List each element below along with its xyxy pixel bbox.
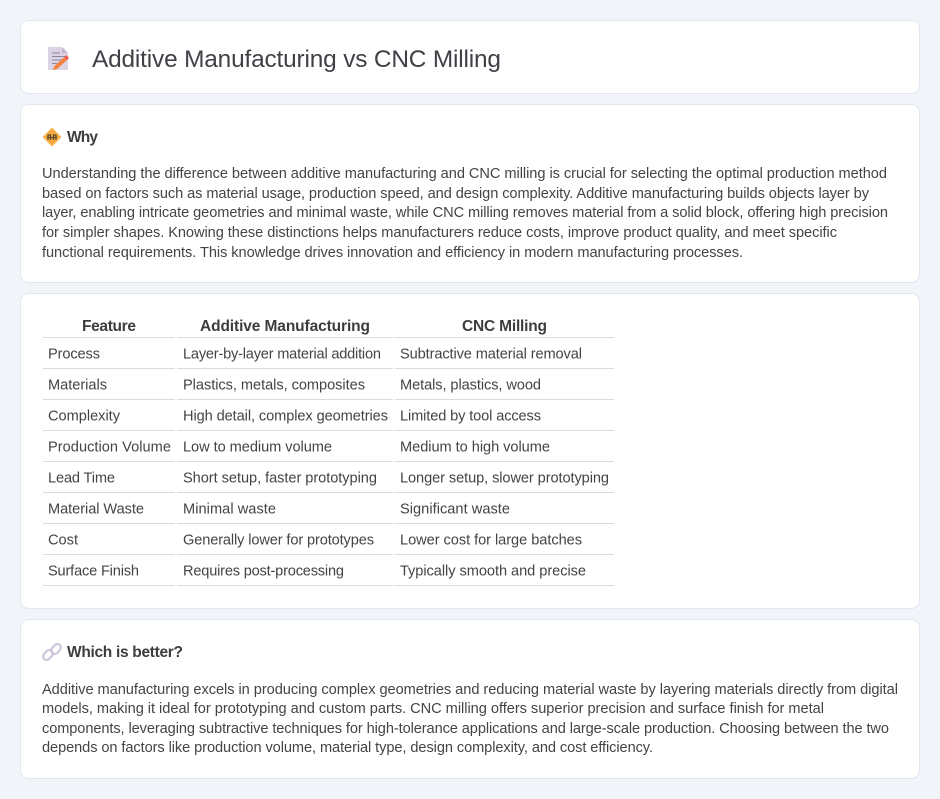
row: lead time: Longer setup, slower prototyping [400,470,609,486]
text block: which is better explanation [42,682,898,756]
row: lead time: Short setup, faster prototyping [183,470,377,486]
row: surface finish: Typically smooth and precise [400,564,586,580]
row: production volume: Low to medium volume [183,440,332,456]
row: material waste [48,502,510,518]
row: materials: Materials [48,378,107,394]
text block: why explanation: based on factors such as material usage, production speed, and design complexity. Additive manufacturing builds objects layer by [42,186,870,202]
row: material waste: Significant waste [400,502,510,518]
row: production volume: Medium to high volume [400,440,550,456]
panel: why [20,104,920,282]
icon: link [42,643,62,661]
table header: Additive Manufacturing [200,318,370,335]
text block: which is better explanation: depends on factors like production volume, material type, design complexity, and cost efficiency. [42,740,653,756]
row: cost: Lower cost for large batches [400,532,582,548]
text block: which is better explanation: components, leveraging subtractive techniques for high-tolerance applications and large-scale production. Choosing between the two [42,721,889,737]
text block: which is better explanation: models, making it ideal for prototyping and custom parts. CNC milling offers superior precision and surface finish for metal [42,701,824,717]
row: production volume [48,440,550,456]
panel: title header [20,20,920,94]
text block: why explanation: Understanding the difference between additive manufacturing and CNC milling is crucial for selecting the optimal production method [42,166,887,182]
table header: Feature [82,318,136,335]
row: materials [48,378,541,394]
row: material waste: Minimal waste [183,502,276,518]
row: lead time: Lead Time [48,470,115,486]
row: cost: Generally lower for prototypes [183,532,374,548]
row: surface finish: Surface Finish [48,564,139,580]
row: complexity: High detail, complex geometries [183,408,388,424]
row: materials: Metals, plastics, wood [400,378,541,394]
row: complexity: Limited by tool access [400,408,541,424]
row: cost [48,532,582,548]
row: cost: Cost [48,532,78,548]
row: production volume: Production Volume [48,440,171,456]
table header [82,318,547,335]
row: process [48,346,582,362]
row: process: Layer-by-layer material addition [183,346,381,362]
row: material waste: Material Waste [48,502,144,518]
row: lead time [48,470,609,486]
row: complexity [48,408,541,424]
table rules [43,338,614,586]
panel: which is better [20,620,920,778]
heading: which is better: Which is better? [67,644,183,661]
icon: memo with pencil [48,47,69,70]
row: process: Subtractive material removal [400,346,582,362]
icon: road sign diamond [43,128,61,146]
table header: CNC Milling [462,318,547,335]
title: Additive Manufacturing vs CNC Milling [92,46,501,73]
row: surface finish: Requires post-processing [183,564,344,580]
row: materials: Plastics, metals, composites [183,378,365,394]
text block: why explanation [42,166,888,261]
panel: comparison table [20,294,920,608]
text block: which is better explanation: Additive manufacturing excels in producing complex geometries and reducing material waste by layering materials directly from digital [42,682,898,698]
text block: why explanation: layer, enabling intricate geometries and minimal waste, while CNC milling removes material from a solid block, offering high precision [42,205,888,221]
row: complexity: Complexity [48,408,121,424]
text block: why explanation: for simpler shapes. Knowing these distinctions helps manufacturers reduce costs, improve product quality, and meet specific [42,225,837,241]
row: process: Process [48,346,100,362]
heading: why: Why [67,129,98,146]
text block: why explanation: functional requirements. This knowledge drives innovation and efficiency in modern manufacturing processes. [42,245,743,261]
row: surface finish [48,564,586,580]
